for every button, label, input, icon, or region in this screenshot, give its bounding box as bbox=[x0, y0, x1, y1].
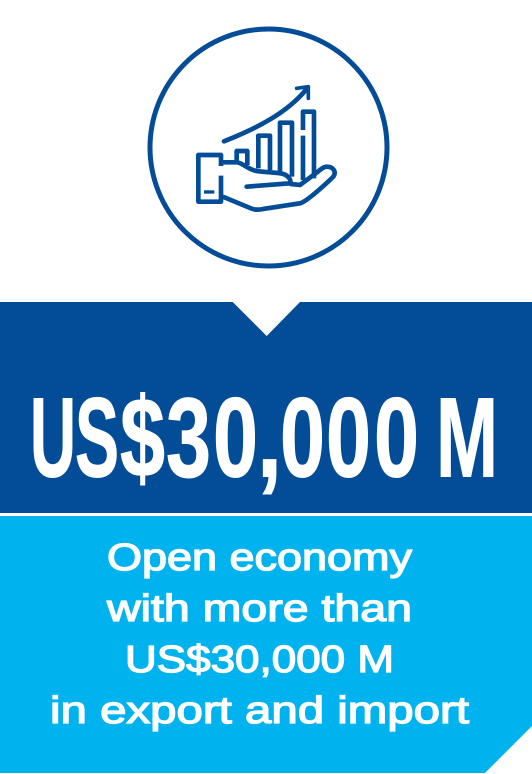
heading: big figure: M bbox=[436, 374, 498, 500]
heading: big figure bbox=[30, 374, 498, 500]
heading: big figure: S bbox=[75, 374, 119, 500]
icon: hand holding rising chart in circle bbox=[150, 29, 387, 266]
heading: big figure: 0 bbox=[213, 374, 258, 500]
heading: big figure: , bbox=[257, 374, 282, 500]
heading: big figure: U bbox=[30, 374, 76, 500]
line 1: Open economy bbox=[107, 537, 412, 579]
line 2: with more than bbox=[106, 588, 412, 630]
heading: big figure: 0 bbox=[326, 374, 371, 500]
panel: dark blue band with notch bbox=[0, 302, 532, 513]
heading: big figure: 0 bbox=[374, 374, 419, 500]
heading: big figure: 0 bbox=[280, 374, 325, 500]
heading: big figure: $ bbox=[120, 374, 165, 500]
line 4: in export and import bbox=[50, 690, 470, 732]
line 3: US$30,000 M bbox=[125, 639, 394, 681]
text block: description bbox=[50, 537, 470, 732]
heading: big figure: 3 bbox=[166, 374, 211, 500]
panel: light blue description with cut corner bbox=[0, 516, 532, 773]
